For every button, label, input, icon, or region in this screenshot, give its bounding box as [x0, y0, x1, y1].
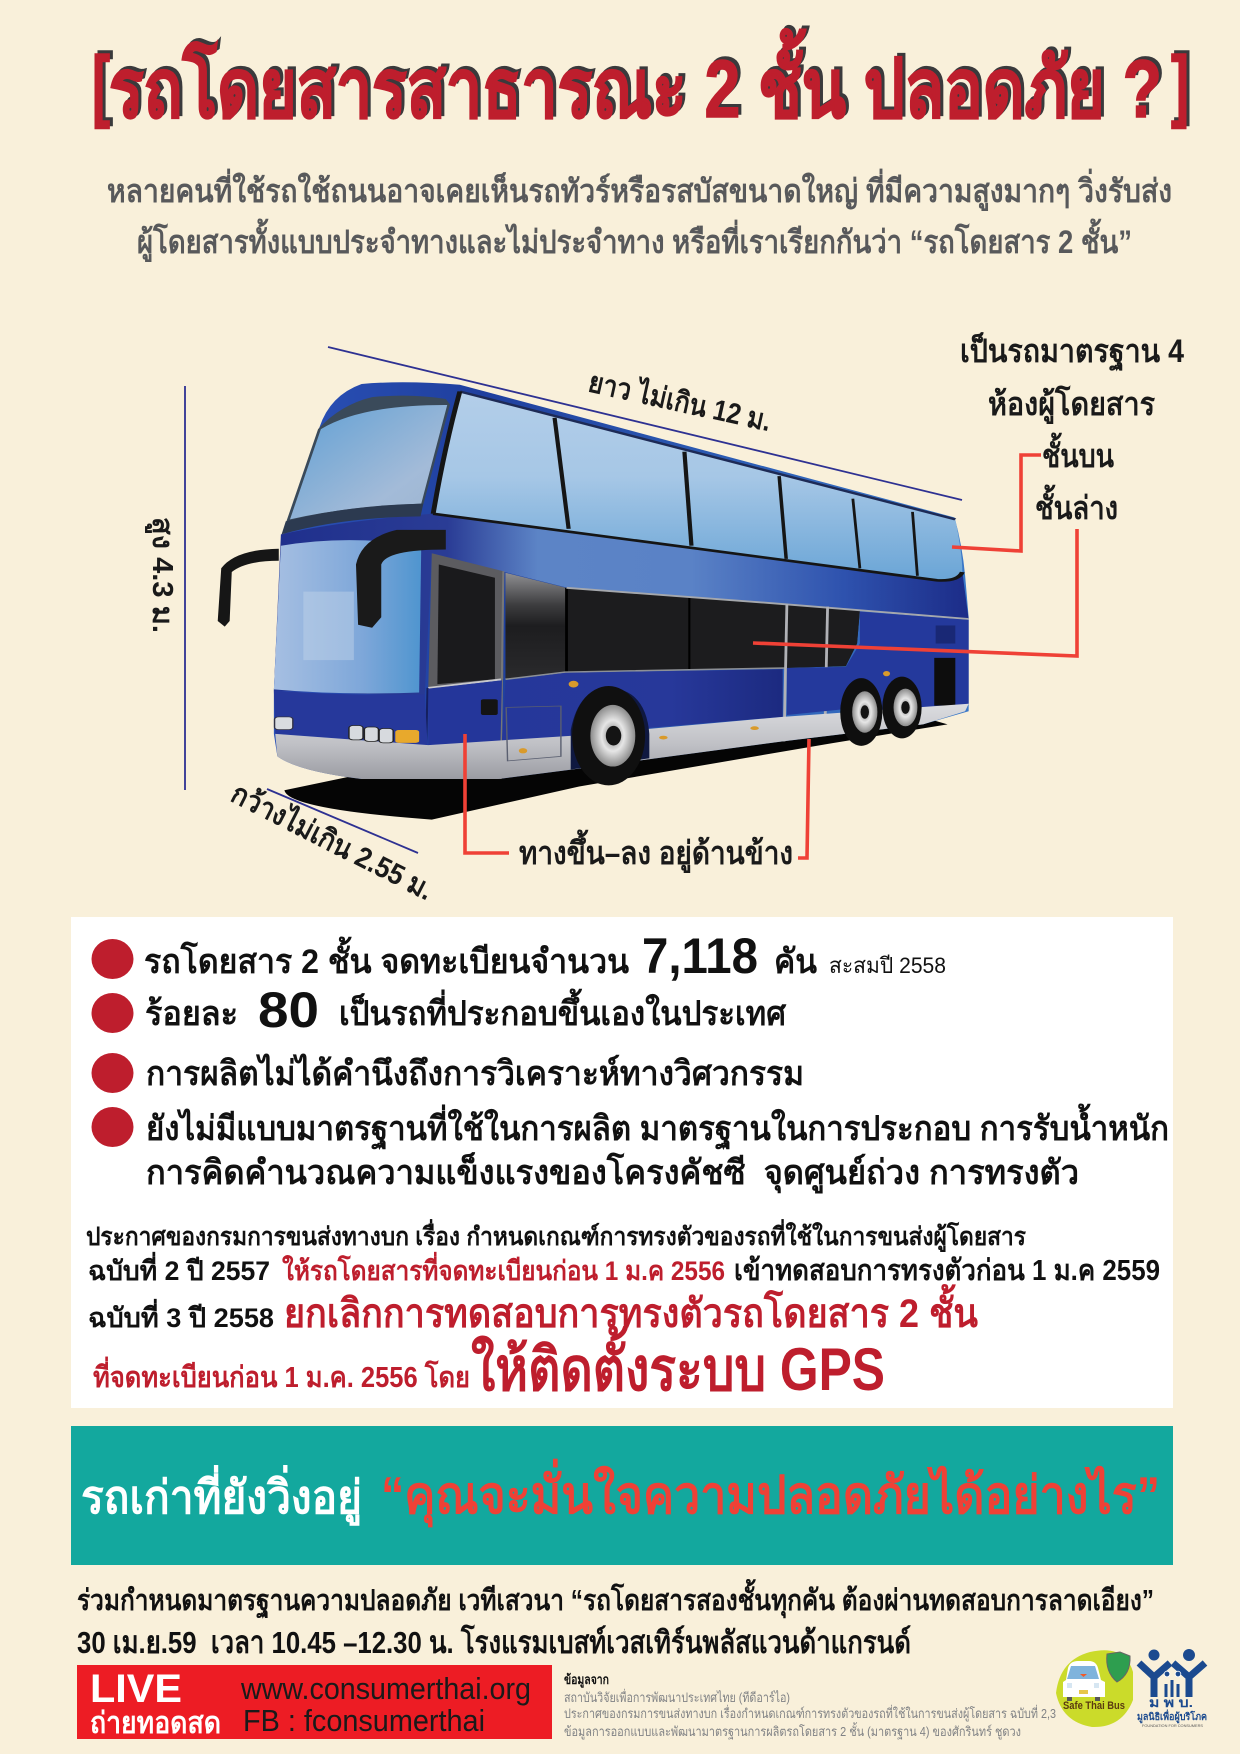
live banner: LIVE: [90, 1667, 182, 1711]
dimension line: height: [184, 386, 186, 790]
sources: สถาบันวิจัยเพื่อการพัฒนาประเทศไทย (ทีดีอาร์ไอ): [564, 1689, 790, 1705]
lower side windows: [505, 573, 860, 679]
gray skirt: [275, 704, 969, 779]
fact 2: เป็นรถที่ประกอบขึ้นเองในประเทศ: [339, 988, 786, 1033]
callout lines: red leaders: [465, 455, 1077, 858]
fact 3: การผลิตไม่ได้คำนึงถึงการวิเคราะห์ทางวิศวกรรม: [146, 1053, 804, 1093]
title: ]: [1171, 40, 1189, 129]
label: standard 4 bus: เป็นรถมาตรฐาน 4: [960, 331, 1184, 372]
banner: question: “คุณจะมั่นใจความปลอดภัยได้อย่างไร”: [381, 1459, 1160, 1528]
belt panel: [274, 514, 969, 696]
sources: ข้อมูลการออกแบบและพัฒนามาตรฐานการผลิตรถโดยสาร 2 ชั้น (มาตรฐาน 4) ของศักรินทร์ ชูดวง: [564, 1722, 1021, 1740]
regulation text: ฉบับที่ 3 ปี 2558: [88, 1298, 274, 1333]
fact 1: 7,118: [642, 928, 758, 984]
bullet 2: [92, 993, 134, 1033]
van: [1063, 1661, 1105, 1701]
label: standard 4 bus: ห้องผู้โดยสาร: [988, 385, 1155, 425]
logo: Foundation for Consumers: มูลนิธิเพื่อผู้บริโภค: [1137, 1709, 1207, 1724]
luggage door: [506, 706, 561, 761]
intro text: [107, 168, 1172, 263]
label: standard 4 bus: ชั้นล่าง: [1035, 484, 1118, 526]
regulation text: ที่จดทะเบียนก่อน 1 ม.ค. 2556 โดย: [93, 1356, 470, 1394]
label: standard 4 bus: [960, 331, 1184, 526]
regulation text: ยกเลิกการทดสอบการทรงตัวรถโดยสาร 2 ชั้น: [284, 1284, 978, 1336]
fact 2: 80: [258, 982, 319, 1038]
live banner: www.consumerthai.org: [240, 1671, 531, 1706]
logo: Foundation for Consumers: FOUNDATION FOR CONSUMERS: [1142, 1723, 1203, 1728]
live banner: ถ่ายทอดสด: [90, 1707, 221, 1740]
fact 4: ยังไม่มีแบบมาตรฐานที่ใช้ในการผลิต มาตรฐานในการประกอบ การรับน้ำหนัก: [146, 1103, 1169, 1151]
fact 4: การคิดคำนวณความแข็งแรงของโครงคัชซี จุดศูนย์ถ่วง การทรงตัว: [146, 1151, 1079, 1194]
logo: Safe Thai Bus: [1056, 1650, 1133, 1727]
dimension label: width: กว้างไม่เกิน 2.55 ม.: [226, 776, 439, 907]
fact 2: ร้อยละ: [145, 995, 238, 1033]
sources: ประกาศของกรมการขนส่งทางบก เรื่องกำหนดเกณฑ์การทรงตัวของรถที่ใช้ในการขนส่งผู้โดยสาร ฉบับที่ 2,3: [564, 1705, 1056, 1722]
sources: [564, 1672, 1056, 1740]
shield: [1107, 1652, 1130, 1682]
logo: Safe Thai Bus: Safe Thai Bus: [1063, 1700, 1125, 1712]
mirror right: [356, 530, 446, 628]
regulation text: ฉบับที่ 2 ปี 2557: [88, 1251, 270, 1286]
front wheel: [571, 686, 649, 785]
banner: question: รถเก่าที่ยังวิ่งอยู่: [81, 1465, 362, 1526]
fact 2: [145, 982, 786, 1038]
regulation text: [86, 1219, 1160, 1403]
panel: facts: [71, 917, 1173, 1408]
fact 1: [144, 928, 946, 984]
banner: question: [71, 1426, 1173, 1565]
bus shadow: [284, 711, 948, 820]
live banner: FB : fconsumerthai: [243, 1703, 485, 1738]
regulation text: ประกาศของกรมการขนส่งทางบก เรื่อง กำหนดเกณฑ์การทรงตัวของรถที่ใช้ในการขนส่งผู้โดยสาร: [86, 1219, 1027, 1253]
lower side panel: [502, 669, 783, 741]
logo: Foundation for Consumers: [1137, 1649, 1207, 1728]
mirror left: [218, 549, 279, 627]
sources: ข้อมูลจาก: [564, 1672, 609, 1688]
dimension line: width: [267, 789, 418, 853]
title: [: [92, 40, 110, 129]
headlights: [275, 717, 419, 743]
bullet 1: [92, 939, 134, 979]
dimension line: length: [328, 347, 962, 500]
regulation text: ให้รถโดยสารที่จดทะเบียนก่อน 1 ม.ค 2556: [282, 1251, 725, 1286]
regulation text: เข้าทดสอบการทรงตัวก่อน 1 ม.ค 2559: [734, 1255, 1160, 1287]
fact 1: สะสมปี 2558: [829, 953, 946, 978]
event text: [77, 1578, 1154, 1660]
logo: Foundation for Consumers: ม พ บ.: [1149, 1695, 1193, 1710]
event text: 30 เม.ย.59 เวลา 10.45 –12.30 น. โรงแรมเบสท์เวสเทิร์นพลัสแวนด้าแกรนด์: [77, 1624, 911, 1660]
regulation text: ให้ติดตั้งระบบ GPS: [471, 1325, 885, 1403]
upper windshield: [286, 396, 450, 523]
small marker lights: [519, 671, 890, 753]
label: door location: ทางขึ้น–ลง อยู่ด้านข้าง: [519, 829, 793, 874]
live banner: [77, 1665, 552, 1740]
body base: [274, 382, 969, 779]
dimension label: length: ยาว ไม่เกิน 12 ม.: [585, 365, 774, 438]
fact 1: รถโดยสาร 2 ชั้น จดทะเบียนจำนวน: [144, 936, 629, 981]
label: standard 4 bus: ชั้นบน: [1042, 432, 1114, 474]
band under windshield: [282, 504, 423, 534]
illustration: double-decker bus: [218, 382, 969, 820]
dimension label: height: สูง 4.3 ม.: [145, 517, 178, 633]
fact 4: [146, 1103, 1169, 1194]
bullet 4: [92, 1107, 134, 1147]
upper side windows: [433, 391, 962, 580]
bullet 3: [92, 1053, 134, 1093]
fact 1: คัน: [774, 943, 817, 981]
front door: [428, 553, 503, 688]
rear wheels: [840, 677, 922, 746]
lower windshield: [274, 540, 421, 693]
